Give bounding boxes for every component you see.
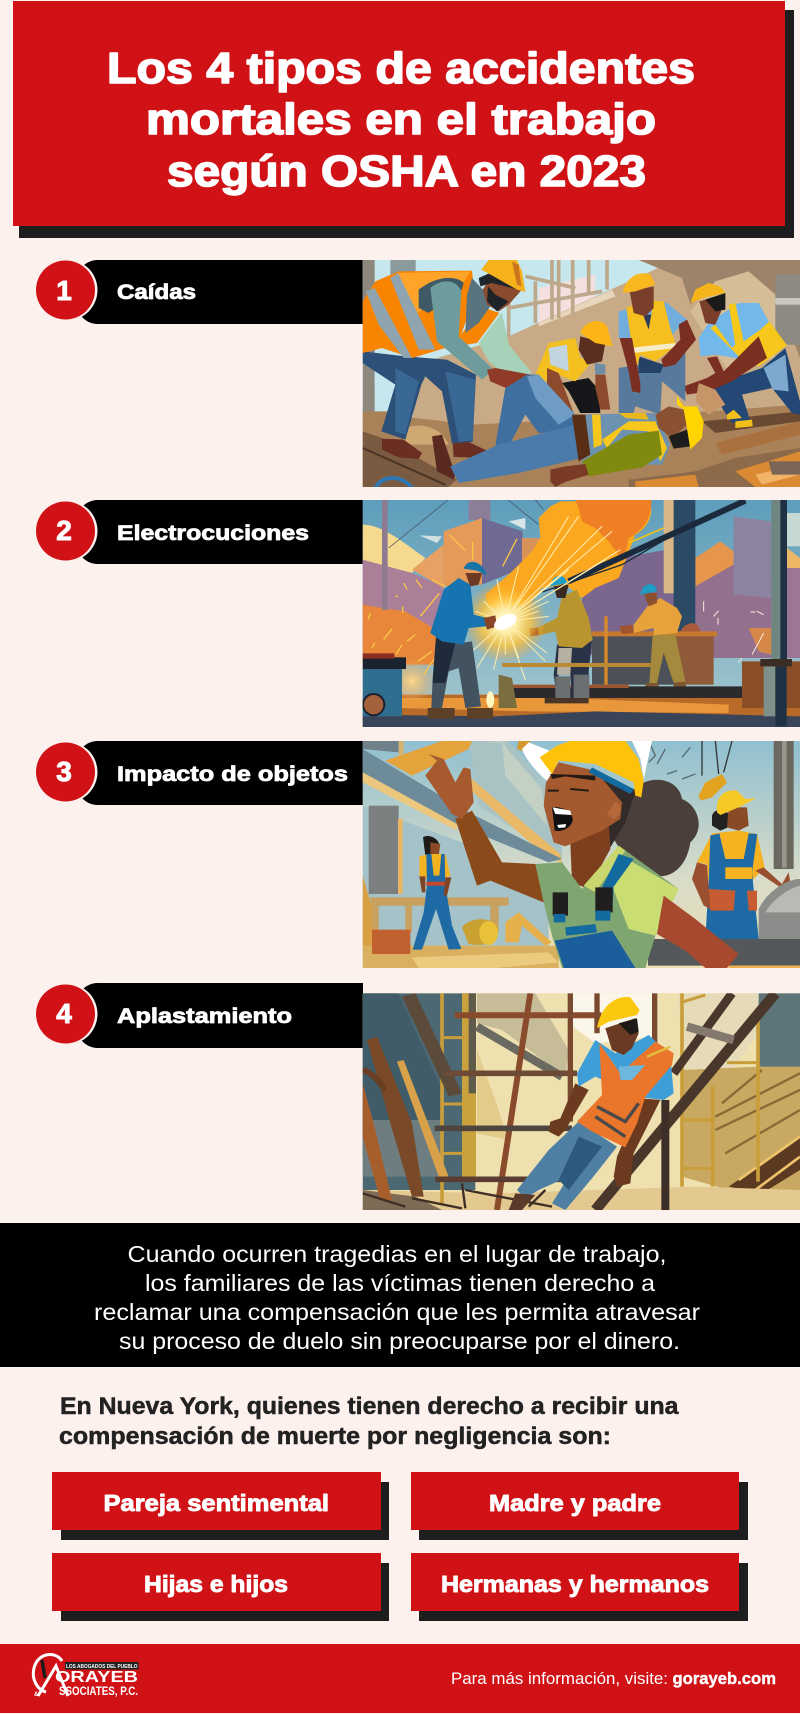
title	[107, 44, 695, 196]
label bar: Electrocuciones: 2	[56, 515, 72, 546]
right worker	[712, 810, 732, 831]
footer	[0, 1644, 800, 1713]
worker centre	[554, 641, 592, 698]
main woman: neck and body	[570, 822, 610, 889]
worker legs	[517, 1122, 617, 1210]
message text: su proceso de duelo sin preocuparse por el dinero.	[119, 1328, 680, 1354]
label bar: Impacto de objetos: 3	[56, 756, 72, 787]
crouching worker	[562, 378, 600, 413]
small worker	[423, 836, 439, 856]
illustration: workers helping a fallen colleague	[362, 260, 800, 487]
box: Hijas e hijos: Hijas e hijos	[144, 1571, 288, 1597]
message text: los familiares de las víctimas tienen derecho a	[145, 1270, 655, 1296]
heading: who can claim: compensación de muerte por negligencia son:	[59, 1423, 611, 1450]
box: Madre y padre: Madre y padre	[489, 1490, 661, 1516]
label bar: Caídas: 1	[56, 275, 72, 306]
worker right	[649, 635, 685, 683]
box: Hermanas y hermanos: Hermanas y hermanos	[441, 1571, 709, 1597]
panel: accident 2 electrocutions	[36, 498, 800, 730]
panel: accident 1 falls	[36, 258, 800, 490]
table	[592, 636, 679, 685]
box: Madre y padre	[411, 1472, 748, 1540]
illustration: worker on collapsing scaffolding	[362, 993, 800, 1210]
header banner	[13, 1, 794, 238]
worker head	[605, 1018, 639, 1055]
left planks	[402, 993, 462, 1097]
crane	[569, 501, 745, 581]
title: según OSHA en 2023	[167, 147, 646, 196]
scaffold yellows	[442, 993, 758, 1203]
heading: who can claim: En Nueva York, quienes tienen derecho a recibir una	[60, 1393, 679, 1420]
standing worker centre	[619, 348, 685, 415]
message text	[94, 1241, 700, 1354]
rust scaffold	[497, 993, 530, 1210]
flame	[485, 500, 651, 608]
standing worker right	[714, 348, 800, 423]
box: Pareja sentimental	[52, 1472, 389, 1540]
title: mortales en el trabajo	[146, 95, 656, 144]
title: Los 4 tipos de accidentes	[107, 44, 695, 93]
box: Hermanas y hermanos	[411, 1553, 748, 1621]
box: Pareja sentimental: Pareja sentimental	[104, 1490, 329, 1516]
website note	[451, 1669, 776, 1688]
heading: who can claim	[59, 1393, 679, 1450]
panel: claimant boxes	[52, 1472, 748, 1621]
logo: Gorayeb & Associates	[33, 1655, 138, 1698]
label bar: Aplastamiento: 4	[56, 998, 72, 1029]
fallen worker	[432, 435, 455, 480]
website note: Para más información, visite:	[451, 1669, 668, 1688]
floor	[363, 695, 800, 727]
main woman: face	[544, 762, 622, 846]
panel: accident 4 crushing	[36, 983, 800, 1222]
message text: reclamar una compensación que les permita atravesar	[94, 1299, 700, 1325]
leaning worker: pants	[363, 351, 476, 443]
logo: Gorayeb & Associates: SSOCIATES, P.C.	[59, 1684, 138, 1698]
label bar: Electrocuciones: Electrocuciones	[117, 522, 309, 545]
rubble	[363, 1183, 552, 1208]
logo: Gorayeb & Associates: LOS ABOGADOS DEL PUEBLO	[66, 1664, 138, 1670]
message text: Cuando ocurren tragedias en el lugar de trabajo,	[128, 1241, 666, 1267]
hanging hook	[702, 741, 732, 776]
worker shirt and vest	[577, 1035, 674, 1100]
label bar: Electrocuciones	[36, 500, 363, 564]
panel: accident 3 struck by objects	[36, 739, 800, 971]
worker arms	[549, 1083, 589, 1137]
sparks	[464, 580, 547, 663]
worker left	[431, 636, 481, 708]
logo: Gorayeb & Associates: &	[34, 1692, 39, 1698]
website note: gorayeb.com	[672, 1669, 776, 1688]
crates right	[742, 661, 800, 708]
leaning worker: shirt	[430, 281, 494, 380]
main woman: helmet	[540, 741, 644, 797]
box: Hijas e hijos	[52, 1553, 389, 1621]
label bar: Impacto de objetos: Impacto de objetos	[117, 763, 348, 786]
label bar: Impacto de objetos	[36, 741, 363, 805]
main woman: hair	[605, 780, 699, 876]
main woman: arms	[657, 896, 739, 968]
illustration: welding sparks on a construction site	[362, 500, 800, 727]
label bar: Caídas: Caídas	[117, 281, 196, 304]
logo: Gorayeb & Associates: ORAYEB	[55, 1669, 138, 1686]
label bar: Aplastamiento: Aplastamiento	[117, 1005, 292, 1028]
illustration: woman worker shouting	[362, 741, 800, 968]
callout: black message band	[0, 1223, 800, 1367]
right tower	[774, 741, 794, 869]
label bar: Aplastamiento	[36, 983, 363, 1048]
right poles	[771, 500, 781, 660]
label bar: Caídas	[36, 260, 363, 324]
leaning worker: vest	[363, 271, 499, 358]
cart	[387, 656, 437, 706]
